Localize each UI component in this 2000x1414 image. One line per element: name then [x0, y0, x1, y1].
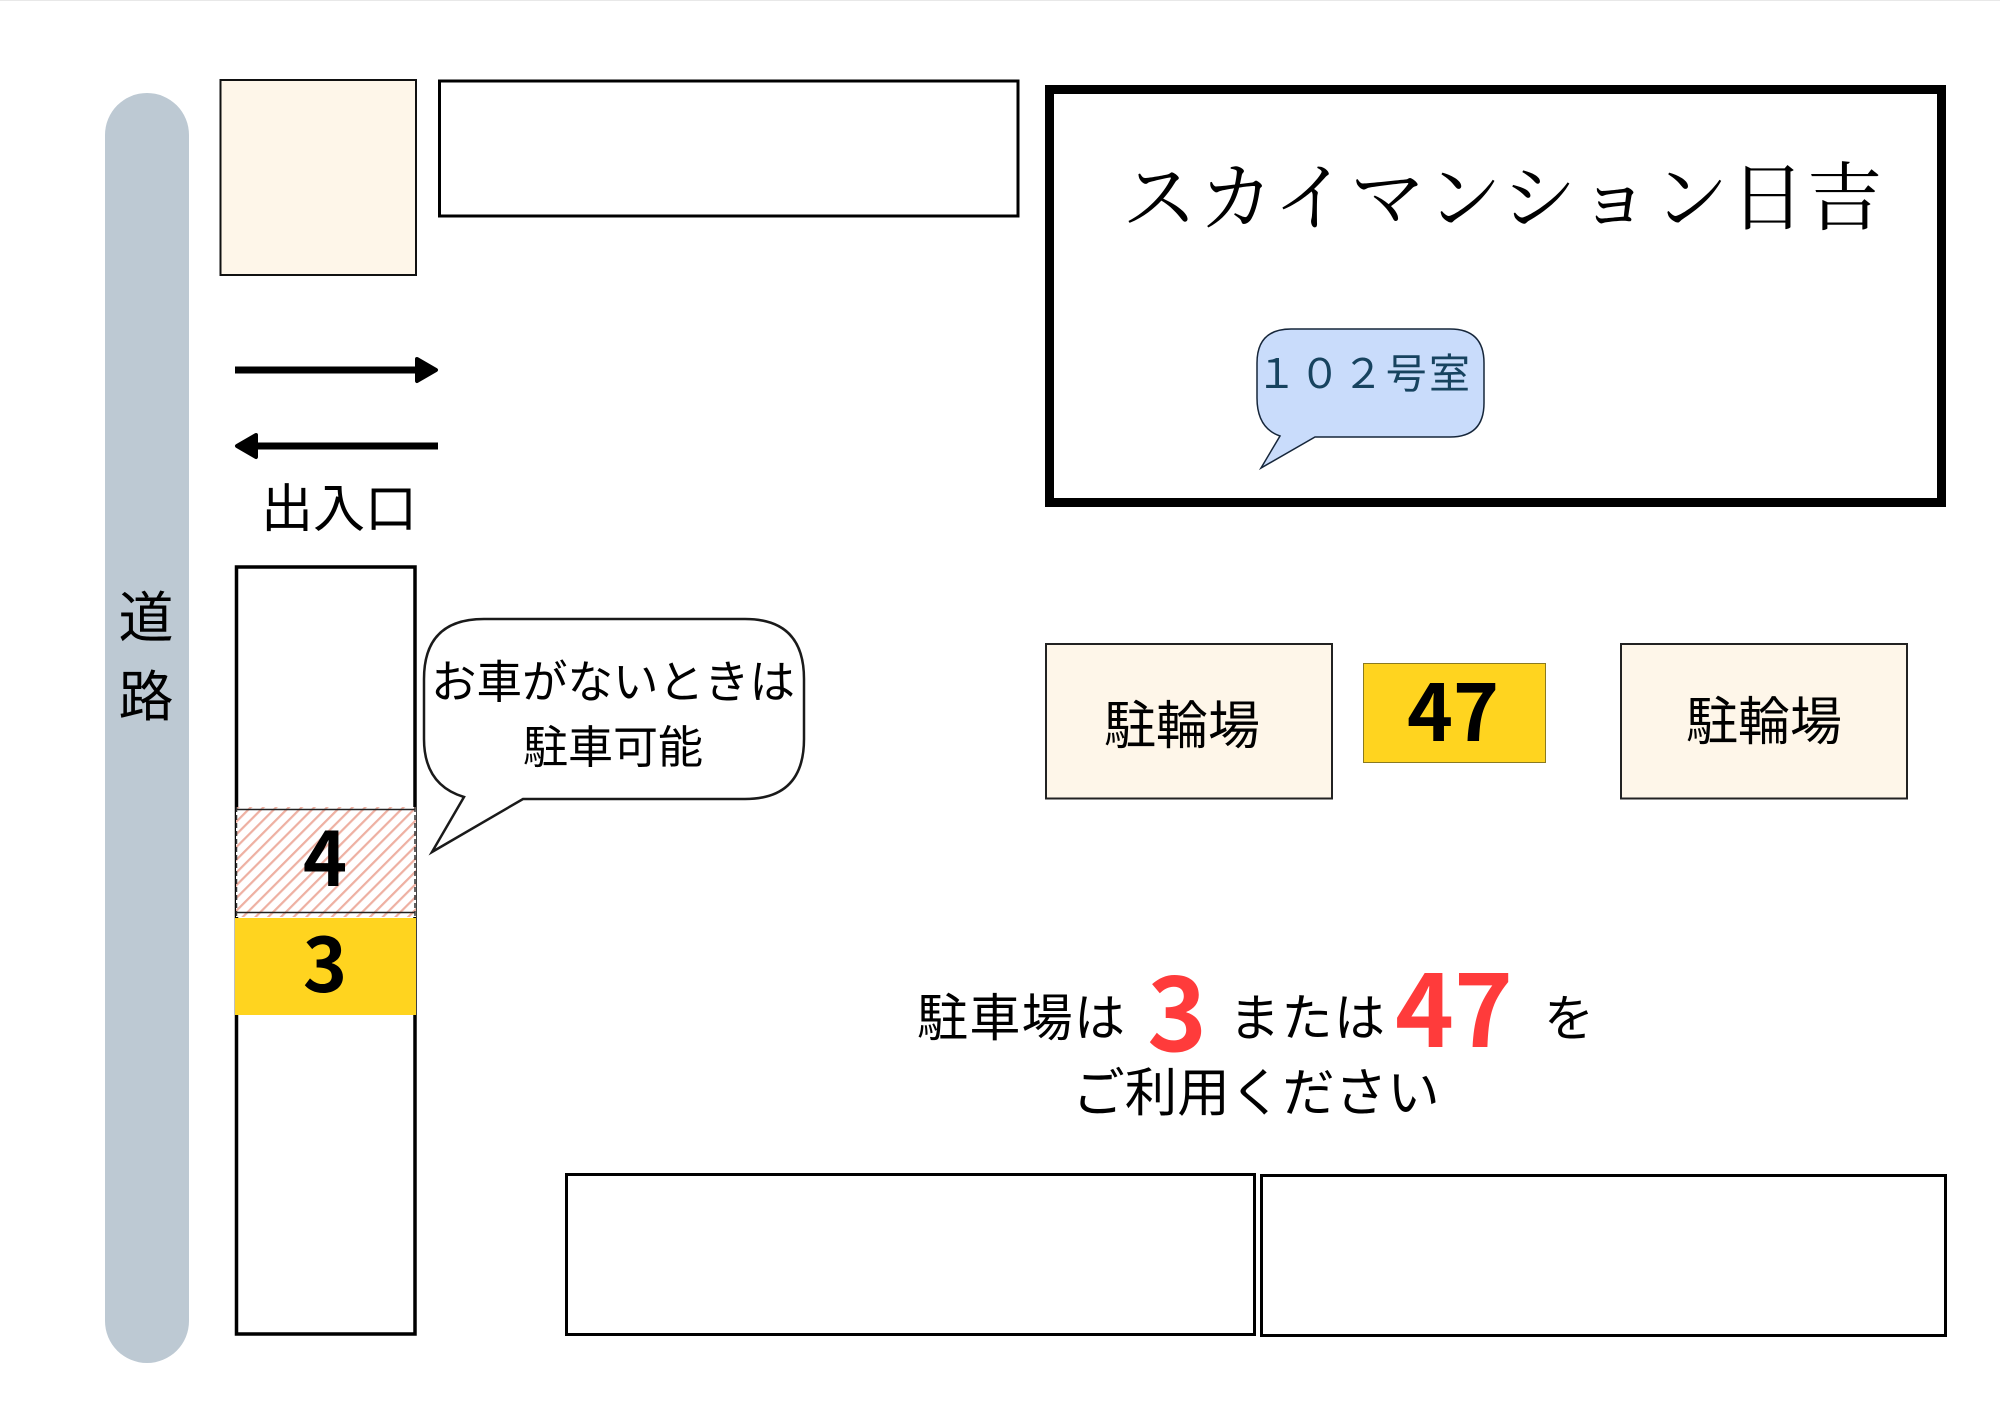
notice text: 3 [1147, 935, 1207, 1081]
top white building [440, 81, 1018, 216]
road [105, 93, 189, 1363]
notice text: ご利用ください [1072, 1051, 1440, 1127]
arrow: exiting [237, 435, 438, 457]
callout: room number: １０２号室 [1256, 340, 1470, 400]
parking space 47: 47 [1407, 652, 1499, 764]
parking space 4: 4 [303, 799, 347, 908]
callout: parking allowed: 駐車可能 [523, 711, 703, 776]
callout: room number [1256, 329, 1484, 468]
road label: 道 [118, 573, 174, 653]
notice text: を [1544, 979, 1594, 1051]
parking space 47 [1364, 652, 1546, 764]
callout: parking allowed [424, 619, 804, 852]
notice text [917, 931, 1594, 1127]
panel: apartment building [1050, 90, 1942, 502]
parking space 4 [236, 799, 416, 917]
title: スカイマンション日吉 [1122, 139, 1882, 246]
bicycle parking right: 駐輪場 [1686, 680, 1842, 755]
notice text: または [1229, 977, 1385, 1051]
arrow: entering [235, 359, 436, 381]
bottom left building [566, 1174, 1254, 1334]
notice text: 駐車場は [917, 977, 1125, 1051]
parking space 3 [235, 905, 416, 1015]
road label: 路 [118, 652, 174, 732]
bicycle parking right [1621, 644, 1907, 798]
cream square building [220, 80, 416, 275]
road label [118, 573, 174, 732]
notice text: 47 [1395, 931, 1513, 1076]
parking space 3: 3 [303, 905, 347, 1014]
callout: parking allowed: お車がないときは [431, 646, 795, 712]
entrance label: 出入口 [261, 467, 417, 542]
bicycle parking left: 駐輪場 [1104, 684, 1260, 759]
bottom right building [1262, 1176, 1946, 1336]
parking column [235, 567, 416, 1334]
bicycle parking left [1046, 644, 1332, 798]
